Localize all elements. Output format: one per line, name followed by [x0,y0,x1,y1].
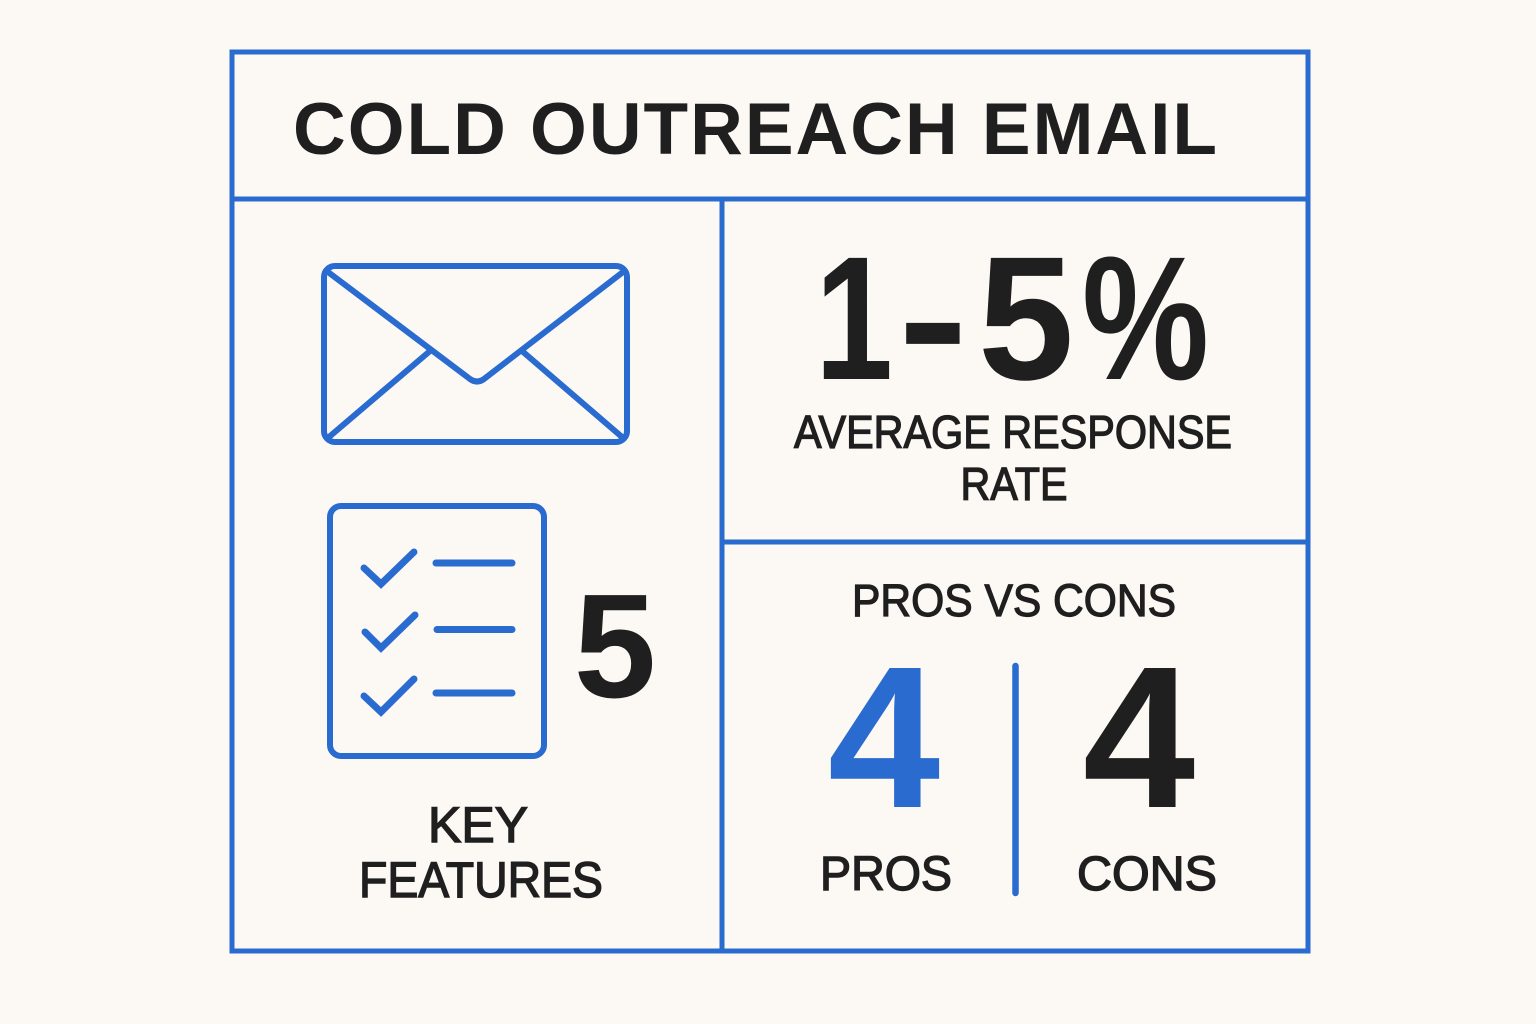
key features number: 5 [574,564,656,729]
key features label: KEY [428,797,528,853]
response rate statistic: % [1082,221,1209,417]
cons label: CONS [1077,848,1217,901]
pros label: PROS [820,848,952,901]
response rate statistic: - [898,221,968,417]
panel: outer frame and dividers [232,52,1308,951]
response rate statistic: 1 [815,221,893,417]
response rate label: RATE [960,458,1068,510]
pros vs cons heading: PROS VS CONS [852,575,1176,626]
cons number: 4 [1083,624,1195,850]
response rate statistic: 5 [978,221,1074,417]
title: COLD OUTREACH EMAIL [293,89,1217,170]
pros number: 4 [828,624,940,850]
response rate label [794,406,1232,510]
icon: envelope [324,266,627,442]
key features label: FEATURES [359,852,603,908]
pros cons divider [1012,666,1019,893]
icon: checklist [330,506,544,756]
key features label [359,797,603,908]
response rate label: AVERAGE RESPONSE [794,406,1232,458]
